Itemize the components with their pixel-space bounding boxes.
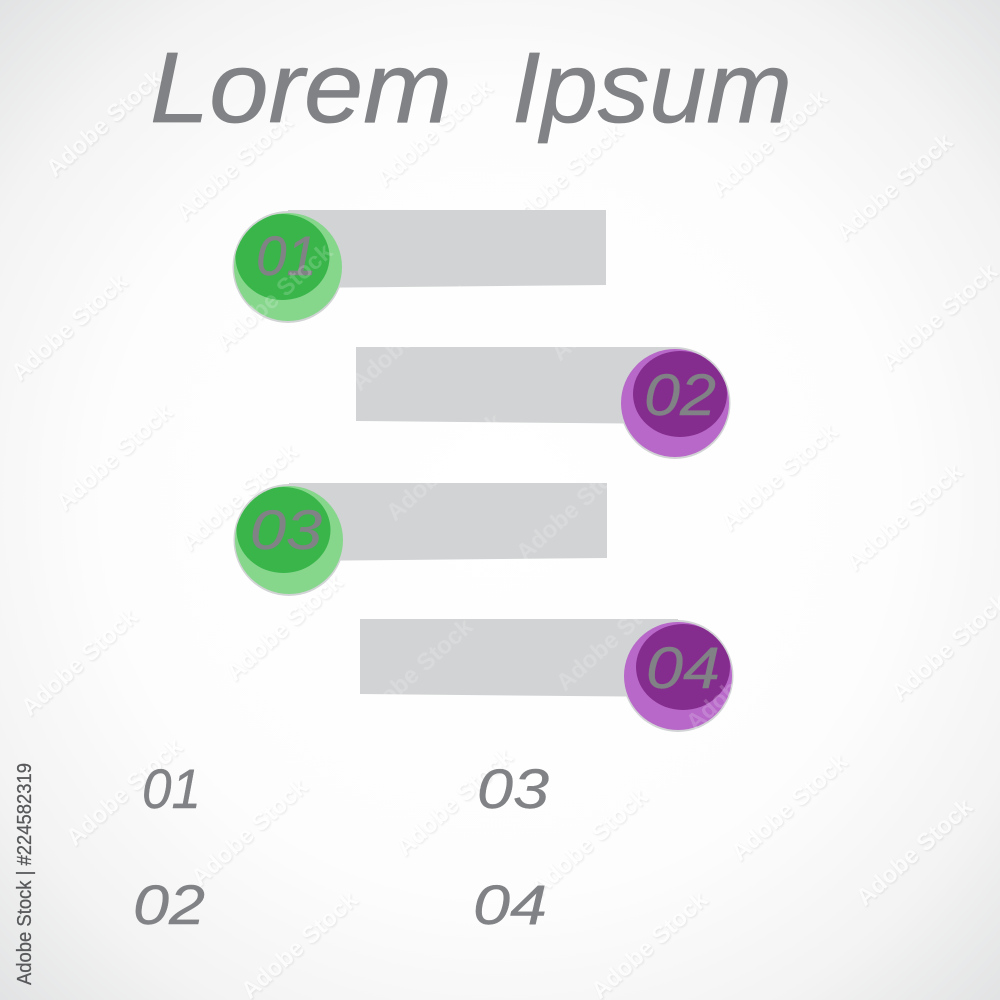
title [150,32,792,144]
watermark: Adobe Stock [171,108,299,226]
watermark: Adobe Stock [371,74,499,192]
watermark over shapes: Adobe Stock [211,238,339,356]
watermark over shapes: Adobe Stock [351,613,479,731]
bar 02 shape [356,347,675,424]
badge 03 [234,484,344,596]
watermark: Adobe Stock [841,458,969,576]
watermark: Adobe Stock [16,603,144,721]
watermark over shapes: Adobe Stock [511,448,639,566]
badge 01 [232,211,344,323]
watermark: Adobe Stock [726,748,854,866]
watermark: Adobe Stock [706,84,834,202]
title: Ipsum [512,32,792,144]
badge 02 [620,347,730,459]
watermark: Adobe Stock [51,398,179,516]
legend label 01: 01 [142,757,201,820]
watermark: Adobe Stock [831,128,959,246]
title: Lorem [150,32,452,144]
watermark: Adobe Stock [501,118,629,236]
watermark: Adobe Stock [41,64,169,182]
watermark over shapes [211,238,809,736]
watermark over shapes: Adobe Stock [551,578,679,696]
bar 01 shape [288,210,606,288]
watermark: Adobe Stock [6,268,134,386]
panel: bar 01 [232,210,606,323]
panel: bar 03 [234,483,607,596]
badge 01: 01 [256,224,317,287]
badge 02: 02 [644,363,716,428]
badge 04: 04 [646,636,720,701]
panel: bar 04 [360,619,734,732]
legend label 03: 03 [477,757,549,820]
stock id vertical text: Adobe Stock | #224582319 [14,763,36,985]
watermark over shapes: Adobe Stock [546,248,674,366]
watermark: Adobe Stock [851,793,979,911]
watermark: Adobe Stock [716,418,844,536]
badge 04 [622,620,734,732]
legend label 02: 02 [133,873,205,936]
watermark: Adobe Stock [61,733,189,851]
bar 04 shape [360,619,678,697]
watermark: Adobe Stock [391,743,519,861]
watermark over shapes: Adobe Stock [346,278,474,396]
legend label 04: 04 [473,873,547,936]
watermark: Adobe Stock [176,438,304,556]
watermark over shapes: Adobe Stock [381,408,509,526]
badge 03: 03 [250,498,322,561]
watermark: Adobe Stock [186,773,314,891]
watermark: Adobe Stock [526,783,654,901]
watermark: Adobe Stock [211,238,339,356]
watermark: Adobe Stock [221,568,349,686]
bar 03 shape [289,483,607,561]
watermark over shapes: Adobe Stock [681,618,809,736]
panel: bar 02 [356,347,730,459]
watermark: Adobe Stock [876,258,1000,376]
